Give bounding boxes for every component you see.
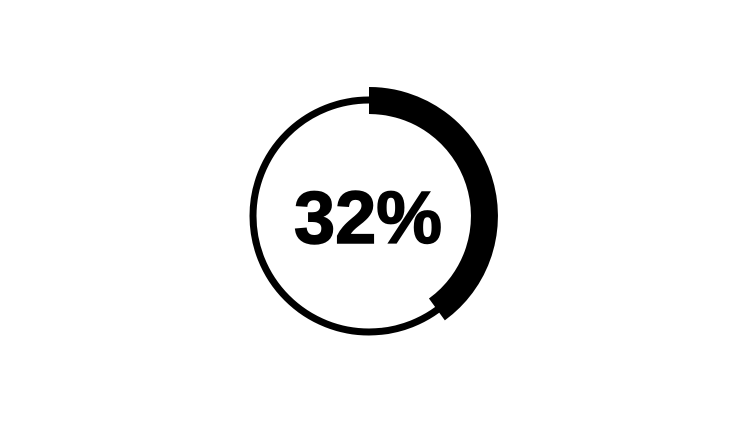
thin ring [253, 100, 485, 332]
thick progress arc [369, 100, 484, 309]
percentage label: 32% [294, 176, 442, 259]
